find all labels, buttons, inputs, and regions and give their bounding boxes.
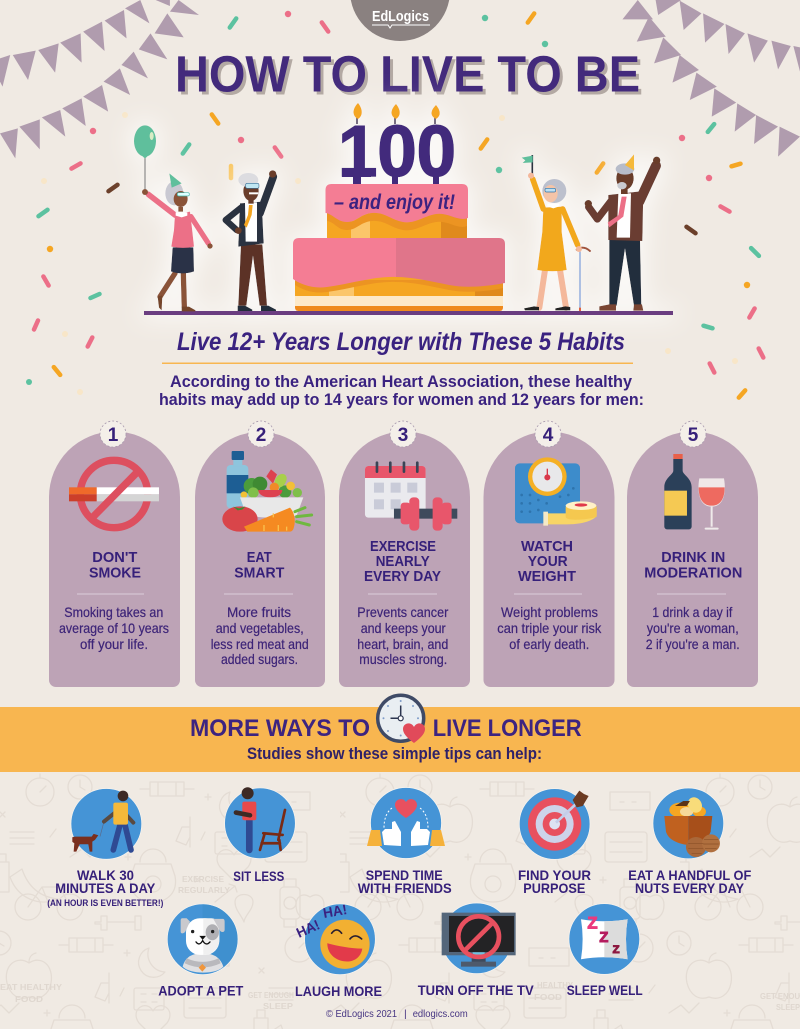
label: EAT A HANDFUL OF [628,868,751,883]
hero illustration: cake and people [134,103,673,315]
footer: | [404,1008,407,1020]
label: NUTS EVERY DAY [635,881,744,896]
text: and keeps your [361,621,446,636]
tip: turn off the tv [418,903,534,998]
orange rule [162,362,633,364]
text: Smoking takes an [64,605,163,620]
heading: SMOKE [89,564,141,582]
banner heading: MORE WAYS TO [190,715,370,742]
heading [234,549,284,582]
icon: crossed-out television [441,903,516,974]
text [497,605,601,652]
text: of early death. [509,637,589,652]
text: muscles strong. [359,652,447,667]
number badge 5 [680,421,706,447]
cake [293,184,505,311]
label [358,868,452,896]
bunting left and right [0,0,800,158]
text: and vegetables, [216,621,304,636]
man with tie [226,170,276,311]
title: HOW TO LIVE TO BE [178,48,643,106]
label: WITH FRIENDS [358,881,452,896]
text [646,605,740,652]
panel: habit 5 drink in moderation [627,421,758,687]
label [47,868,163,909]
intro text: habits may add up to 14 years for women and 12 years for men: [159,390,644,409]
heading [644,549,742,582]
panel: habit 3 exercise [339,421,470,687]
icon: dog [167,904,238,975]
woman with flag and cane [522,155,590,311]
text: added sugars. [221,652,298,667]
text [59,605,169,652]
heading: DRINK IN [661,549,725,566]
tip: spend time with friends [358,788,452,896]
icon: healthy food [222,451,312,532]
tip: adopt a pet [158,904,244,998]
HA! text: HA! [294,916,322,941]
number badge 2: 2 [256,425,266,446]
subtitle: Live 12+ Years Longer with These 5 Habits [177,328,625,356]
icon: no smoking [69,460,159,528]
icon: thumbs up and heart [367,788,445,858]
tip: laugh more [294,901,382,999]
text: average of 10 years [59,621,169,636]
panel: habit 2 eat smart [195,421,325,687]
label [628,868,751,896]
banner heading [190,715,582,742]
text: less red meat and [211,637,309,652]
faint background words: FOOD [15,994,43,1004]
faint background words: EXERCISE [182,874,224,884]
confetti [26,11,763,398]
heading: WATCH [521,538,573,555]
icon: target [519,789,590,859]
tip: sit less [225,787,295,884]
HA! text: HA! [322,901,348,921]
faint background words: SLEEP [263,1001,293,1011]
heading: DON'T [92,549,137,566]
text: can triple your risk [497,621,601,636]
number badge 2 [248,421,274,447]
label: SLEEP WELL [567,983,643,998]
logo: EdLogics [350,0,450,41]
label: WALK 30 [77,868,134,883]
slogan: – and enjoy it! [334,191,455,214]
heading: SMART [234,564,284,582]
heading: EVERY DAY [364,568,441,585]
label: SIT LESS [233,869,284,884]
label: TURN OFF THE TV [418,983,534,998]
heading: EAT [247,549,272,566]
label: MINUTES A DAY [55,881,155,896]
text: 1 drink a day if [652,605,733,620]
table line [144,311,673,315]
text: 2 if you're a man. [646,637,740,652]
candles: 100: 100 [338,112,456,192]
icon: laughing face [305,904,375,975]
footer [326,1008,468,1020]
number badge 1: 1 [108,425,119,446]
icon: bowl of nuts [653,788,724,859]
heading: WEIGHT [518,568,576,585]
icon: pillow with Zs [569,904,640,974]
intro text [159,372,644,409]
text [211,605,309,667]
label: SPEND TIME [366,868,443,883]
text [357,605,449,667]
heading: EXERCISE [370,538,436,555]
heading [89,549,141,582]
panel: habit 1 don't smoke [49,421,180,687]
text: heart, brain, and [357,637,448,652]
logo: EdLogics: EdLogics [372,8,429,25]
man with party hat [585,154,660,311]
HA! text [294,901,348,941]
faint background words: REGULARLY [178,885,230,895]
faint background words: EAT HEALTHY [0,982,62,992]
icon: scale and tape [515,457,597,526]
tip: walk 30 minutes [47,789,163,909]
text: off your life. [80,637,148,652]
tip: eat a handful of nuts [628,788,751,896]
faint background words: FOOD [534,992,562,1002]
number badge 4 [535,421,561,447]
footer: edlogics.com [413,1008,468,1020]
patterned lower background [0,772,800,1029]
tip: sleep well [567,904,643,998]
woman with balloon [134,125,213,311]
text: Weight problems [501,605,598,620]
heading [518,538,576,585]
icon: walking with dog [71,789,142,859]
icon: calendar and dumbbell [365,463,457,531]
footer: © EdLogics 2021 [326,1008,397,1020]
number badge 3: 3 [398,425,408,446]
orange banner [0,707,800,772]
banner subtitle: Studies show these simple tips can help: [247,744,542,763]
faint background words: HEALTHY [537,980,573,990]
heading: YOUR [528,553,568,570]
label: PURPOSE [523,881,585,896]
number badge 5: 5 [688,425,699,446]
number badge 4: 4 [543,425,554,446]
heading: NEARLY [376,553,430,570]
number badge 1 [100,421,126,447]
icon: pillow with Zs: Z [599,930,608,946]
panel: habit 4 watch your weight [484,421,615,687]
icon: clock with heart [378,695,425,743]
banner heading: LIVE LONGER [433,715,582,742]
label: ADOPT A PET [158,984,244,998]
label: LAUGH MORE [295,984,382,999]
faint background words [0,874,800,1012]
icon: pillow with Zs: Z [587,914,598,933]
text: you're a woman, [647,621,739,636]
tip: find your purpose [518,789,591,896]
icon: standing by chair [225,787,295,859]
text: More fruits [227,605,291,620]
title: HOW TO LIVE TO BE [175,46,640,102]
intro text: According to the American Heart Association, these healthy [170,372,633,391]
label [518,868,591,896]
icon: pillow with Zs: Z [613,944,620,956]
label: FIND YOUR [518,868,591,883]
heading: MODERATION [644,564,742,582]
number badge 3 [390,421,416,447]
icon: wine bottle and glass [664,454,725,529]
faint background words: GET ENOUGH [248,990,294,1000]
text: Prevents cancer [357,605,449,620]
heading [364,538,441,585]
label: (AN HOUR IS EVEN BETTER!) [47,898,163,909]
